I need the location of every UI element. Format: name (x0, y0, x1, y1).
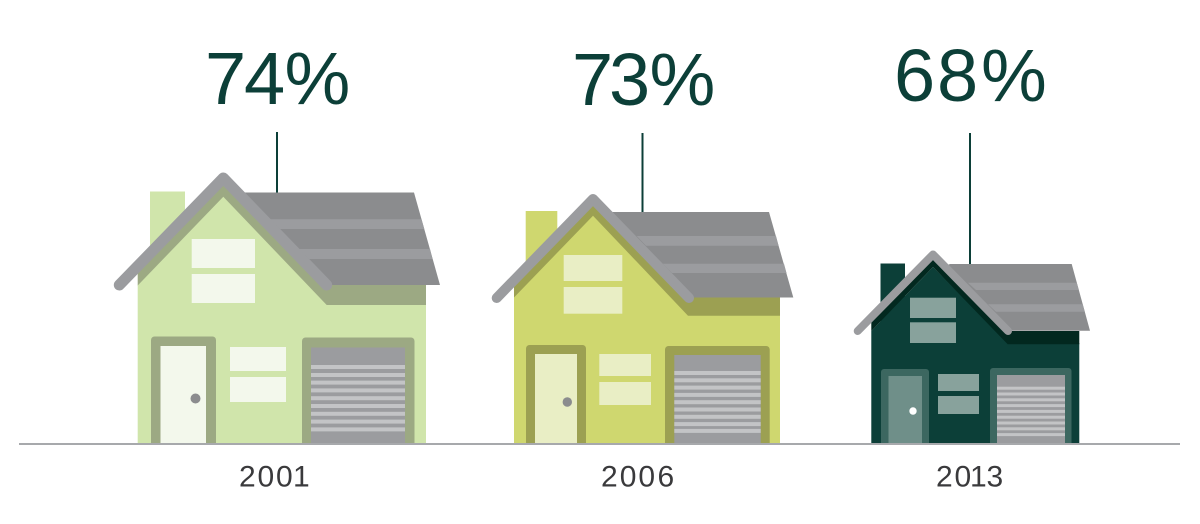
upper windows (564, 255, 622, 314)
lower windows (230, 347, 286, 402)
garage frame (302, 338, 414, 444)
garage door (997, 375, 1065, 444)
roof stripes (968, 283, 1085, 312)
garage slats (674, 371, 761, 433)
percentage: 2001: 74% (205, 37, 350, 120)
roof (240, 192, 440, 285)
leader line: 2013 (969, 133, 971, 265)
leader line: 2001 (276, 132, 278, 193)
door (160, 346, 206, 444)
roof shadow (514, 204, 780, 316)
chimney (880, 264, 905, 324)
lower windows (938, 374, 979, 414)
garage frame (665, 346, 770, 444)
chimney (150, 192, 185, 262)
roof (608, 212, 793, 298)
roof stripes (270, 219, 432, 259)
walls (138, 196, 426, 444)
door (888, 376, 922, 444)
garage door (674, 355, 761, 444)
year label: 2006: 2006 (601, 460, 674, 494)
garage door (311, 348, 405, 444)
garage slats (311, 365, 405, 431)
walls (514, 215, 780, 444)
leader line: 2006 (642, 133, 644, 213)
door frame (526, 345, 586, 444)
gable trim (497, 199, 689, 298)
gable trim (858, 254, 1008, 331)
roof (945, 264, 1090, 331)
ground line (19, 443, 1180, 445)
walls (871, 267, 1079, 444)
door knob (190, 394, 200, 404)
door knob (909, 407, 917, 415)
upper windows (910, 298, 956, 343)
upper windows (192, 239, 255, 303)
roof shadow (138, 184, 426, 305)
door (535, 354, 577, 444)
garage frame (990, 368, 1072, 444)
roof shadow (871, 258, 1079, 344)
gable trim (119, 178, 327, 285)
roof stripes (637, 236, 786, 273)
house: 2001 (119, 178, 440, 444)
house: 2006 (497, 199, 793, 444)
lower windows (599, 354, 651, 405)
year label: 2013: 2013 (936, 460, 1003, 494)
door knob (563, 397, 572, 407)
door frame (151, 336, 216, 444)
house: 2013 (858, 254, 1090, 444)
chimney (526, 211, 557, 281)
door frame (881, 369, 929, 444)
percentage: 2013: 68% (894, 34, 1047, 117)
year label: 2001: 2001 (239, 460, 310, 494)
percentage: 2006: 73% (572, 38, 715, 121)
garage slats (997, 387, 1065, 436)
